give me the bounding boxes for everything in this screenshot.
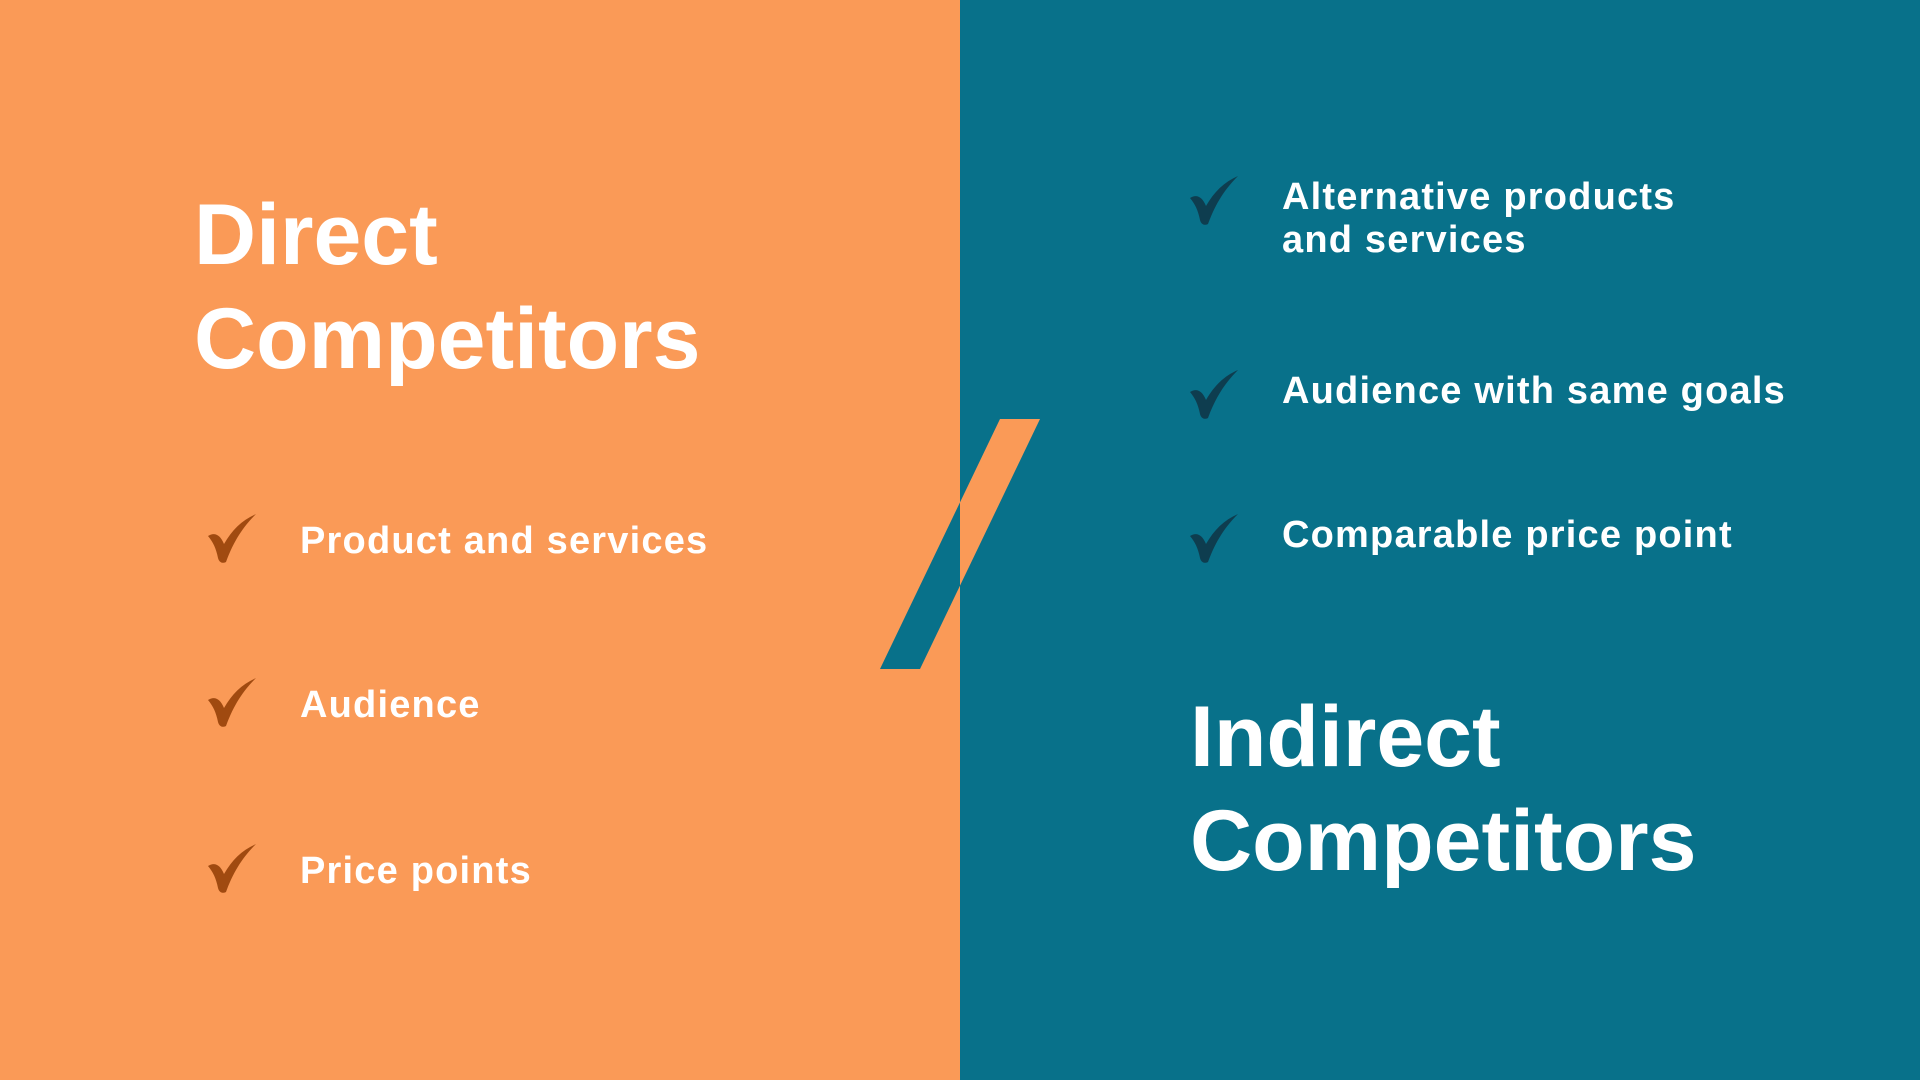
item: price points — [208, 844, 532, 893]
item: audience — [208, 678, 481, 727]
panel: indirect competitors — [960, 0, 1920, 1080]
list: direct — [208, 514, 708, 893]
item: price points: Price points — [300, 850, 532, 892]
item: product and services: Product and services — [300, 520, 708, 562]
title: Indirect Competitors: Indirect — [1190, 689, 1501, 785]
item: audience same goals: Audience with same goals — [1282, 370, 1786, 412]
slash divider — [880, 419, 1040, 669]
title: Indirect Competitors: Competitors — [1190, 793, 1696, 889]
title: Direct Competitors: Competitors — [194, 291, 700, 387]
title: Direct Competitors — [194, 187, 700, 387]
item: alternative products — [1190, 176, 1676, 261]
panel: direct competitors — [0, 0, 960, 1080]
title: Indirect Competitors — [1190, 689, 1696, 889]
title: Direct Competitors: Direct — [194, 187, 438, 283]
item: audience: Audience — [300, 684, 481, 726]
item: alternative products: and services — [1282, 219, 1527, 261]
item: comparable price: Comparable price point — [1282, 514, 1733, 556]
item: alternative products: Alternative products — [1282, 176, 1676, 218]
item: product and services — [208, 514, 708, 563]
list: indirect — [1190, 176, 1786, 563]
